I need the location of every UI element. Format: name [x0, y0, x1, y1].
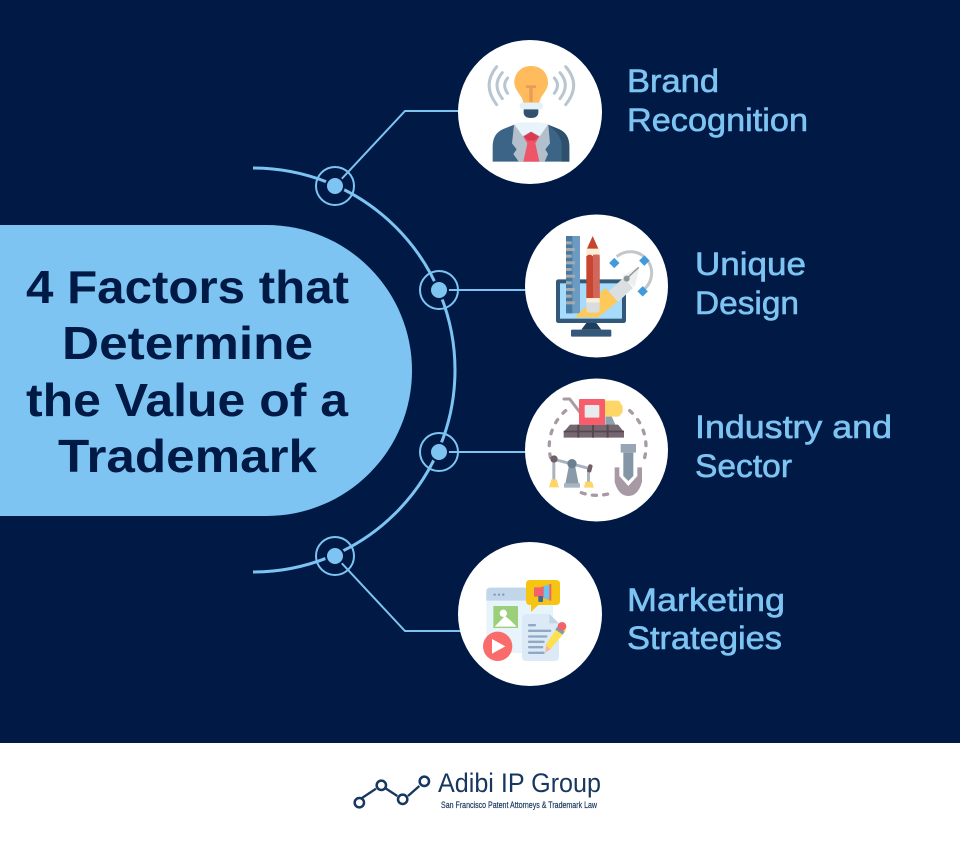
label: brand recognition: Recognition — [627, 102, 808, 138]
title: the Value of a — [26, 374, 348, 426]
logo name: Adibi IP Group — [438, 768, 601, 798]
label: unique design: Unique — [695, 246, 806, 282]
label: marketing strategies — [627, 582, 785, 656]
label: brand recognition: Brand — [627, 63, 719, 99]
label: industry and sector: Sector — [695, 448, 792, 484]
factor 2: unique design icon — [525, 214, 668, 358]
label: brand recognition — [627, 63, 808, 138]
factor 4: marketing strategies icon — [458, 542, 602, 686]
title — [26, 261, 349, 482]
label: industry and sector: Industry and — [695, 409, 892, 445]
footer panel — [0, 743, 960, 850]
factor 3: industry and sector icon — [525, 378, 668, 522]
title pill — [0, 225, 412, 516]
label: marketing strategies: Marketing — [627, 582, 785, 618]
label: marketing strategies: Strategies — [627, 620, 782, 656]
footer logo — [355, 768, 601, 811]
icon: logo line chart — [355, 777, 429, 807]
connector network — [253, 111, 530, 631]
title: Determine — [62, 317, 313, 369]
label: unique design: Design — [695, 285, 799, 321]
logo tagline: San Francisco Patent Attorneys & Trademark Law — [441, 800, 597, 811]
factor 1: brand recognition icon — [458, 40, 602, 184]
title: Trademark — [58, 430, 317, 482]
label: unique design — [695, 246, 806, 321]
title: 4 Factors that — [26, 261, 349, 313]
label: industry and sector — [695, 409, 892, 484]
